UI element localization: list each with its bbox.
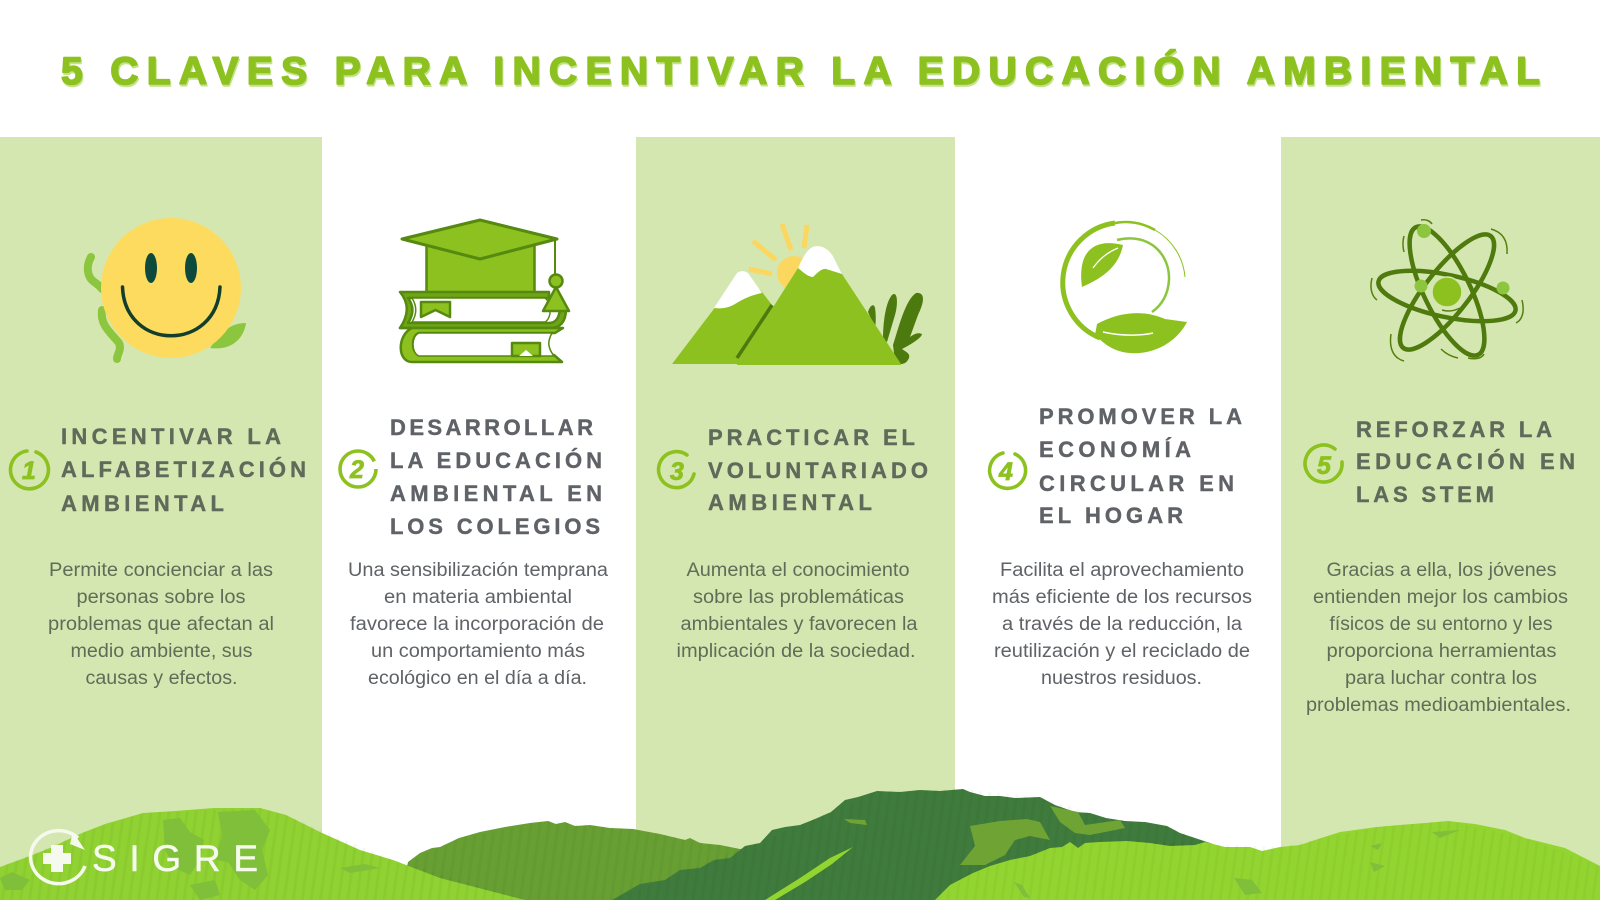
heading 3: VOLUNTARIADO xyxy=(708,458,928,483)
text block 4: más eficiente de los recursos xyxy=(992,587,1252,608)
number 2 badge xyxy=(340,451,376,487)
heading 4: EL HOGAR xyxy=(1039,503,1183,528)
heading 1: INCENTIVAR LA xyxy=(61,424,281,449)
number 5 badge: 5 xyxy=(1317,452,1332,480)
hill: dark green xyxy=(612,789,1240,900)
heading 2: DESARROLLAR xyxy=(390,415,593,440)
text block 4 xyxy=(992,560,1252,689)
text block 1: personas sobre los xyxy=(76,587,246,608)
heading 1: AMBIENTAL xyxy=(61,491,224,516)
heading 5: REFORZAR LA xyxy=(1356,417,1552,442)
text block 3 xyxy=(676,560,918,662)
text block 3: Aumenta el conocimiento xyxy=(686,560,910,581)
panel: clave 5 xyxy=(1305,217,1575,716)
text block 3: sobre las problemáticas xyxy=(693,587,904,608)
logo: SIGRE xyxy=(31,831,258,884)
number 5 badge xyxy=(1305,445,1342,482)
number 2 badge: 2 xyxy=(349,456,364,484)
heading 4: ECONOMÍA xyxy=(1039,437,1191,462)
heading 4: CIRCULAR EN xyxy=(1039,471,1234,496)
hills landscape xyxy=(0,789,1600,900)
heading 3 xyxy=(708,425,928,515)
icon: smiley xyxy=(88,218,246,359)
icon: leaves in a circle xyxy=(1063,222,1187,353)
text block 2: Una sensibilización temprana xyxy=(348,560,608,581)
hill: mid green xyxy=(400,821,780,900)
heading 4 xyxy=(1039,404,1242,528)
text block 4: reutilización y el reciclado de xyxy=(994,641,1250,662)
text block 1: problemas que afectan al xyxy=(48,614,274,635)
number 3 badge: 3 xyxy=(670,458,684,486)
title: 5 CLAVES PARA INCENTIVAR LA EDUCACIÓN AMBIENTAL xyxy=(62,51,1541,95)
panel: background column 1 xyxy=(0,137,322,900)
text block 1: medio ambiente, sus xyxy=(70,641,252,662)
text block 3: implicación de la sociedad. xyxy=(676,641,916,662)
text block 5: Gracias a ella, los jóvenes xyxy=(1326,560,1556,581)
number 3 badge xyxy=(659,452,694,488)
number 4 badge: 4 xyxy=(998,458,1013,486)
text block 2: en materia ambiental xyxy=(384,587,572,608)
text block 2: favorece la incorporación de xyxy=(350,614,604,635)
panel: background column 5 xyxy=(1281,137,1600,900)
heading 5 xyxy=(1356,417,1575,507)
text block 5: físicos de su entorno y les xyxy=(1330,614,1552,635)
text block 4: a través de la reducción, la xyxy=(1002,614,1242,635)
heading 1: ALFABETIZACIÓN xyxy=(61,457,306,482)
number 4 badge xyxy=(990,453,1026,488)
heading 3: PRACTICAR EL xyxy=(708,425,915,450)
text block 3: ambientales y favorecen la xyxy=(680,614,918,635)
text block 2: un comportamiento más xyxy=(371,641,585,662)
heading 2: AMBIENTAL EN xyxy=(390,481,602,506)
panel: clave 1 xyxy=(10,218,306,689)
icon: graduation cap on books xyxy=(400,220,569,362)
icon: atom xyxy=(1371,217,1523,365)
heading 5: LAS STEM xyxy=(1356,482,1494,507)
text block 5: para luchar contra los xyxy=(1345,668,1537,689)
heading 4: PROMOVER LA xyxy=(1039,404,1242,429)
hill: light green left xyxy=(0,808,525,900)
text block 5 xyxy=(1306,560,1571,716)
heading 5: EDUCACIÓN EN xyxy=(1356,449,1575,474)
text block 2: ecológico en el día a día. xyxy=(368,668,587,689)
heading 2 xyxy=(390,415,602,539)
logo: SIGRE: SIGRE xyxy=(92,838,258,879)
title: 5 CLAVES PARA INCENTIVAR LA EDUCACIÓN AMBIENTAL xyxy=(61,49,1540,93)
text block 4: nuestros residuos. xyxy=(1041,668,1202,689)
panel: clave 2 xyxy=(340,220,608,689)
text block 5: problemas medioambientales. xyxy=(1306,695,1571,716)
text block 1: Permite concienciar a las xyxy=(49,560,273,581)
text block 5: entienden mejor los cambios xyxy=(1313,587,1568,608)
text block 2 xyxy=(348,560,608,689)
text block 1: causas y efectos. xyxy=(86,668,238,689)
text block 5: proporciona herramientas xyxy=(1326,641,1556,662)
number 1 badge: 1 xyxy=(22,457,36,485)
number 1 badge xyxy=(10,451,48,489)
panel: background column 3 xyxy=(636,137,955,900)
heading 3: AMBIENTAL xyxy=(708,490,872,515)
icon: mountains with sun xyxy=(672,224,923,365)
heading 1 xyxy=(61,424,306,516)
heading 2: LA EDUCACIÓN xyxy=(390,448,602,473)
heading 2: LOS COLEGIOS xyxy=(390,514,600,539)
panel: clave 3 xyxy=(659,224,928,662)
text block 4: Facilita el aprovechamiento xyxy=(1000,560,1244,581)
hill: light green right xyxy=(935,821,1600,900)
panel: clave 4 xyxy=(990,222,1252,689)
text block 1 xyxy=(48,560,274,689)
